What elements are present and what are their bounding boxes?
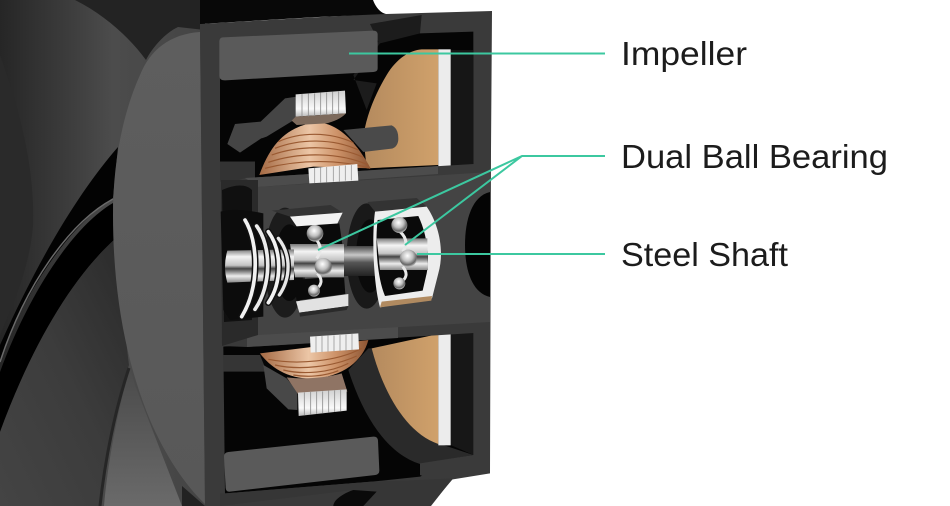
stator core stub xyxy=(343,125,398,152)
left bearing cage and balls xyxy=(307,225,332,297)
impeller magnet bottom xyxy=(224,437,379,492)
lamination middle top xyxy=(308,164,358,183)
white strip bottom xyxy=(438,323,451,445)
white strip top xyxy=(438,49,451,174)
leader line: steel shaft xyxy=(417,253,605,255)
fan blades background xyxy=(0,0,205,506)
left bearing xyxy=(272,205,348,317)
lamination bottom xyxy=(298,389,347,416)
label: Impeller: Impeller xyxy=(621,35,747,72)
copper coil bottom xyxy=(260,340,368,379)
dual ball bearing assembly xyxy=(221,198,441,320)
stator bend bottom xyxy=(287,373,347,394)
label: Steel Shaft: Steel Shaft xyxy=(621,236,788,273)
right bearing xyxy=(367,198,441,307)
lamination top xyxy=(292,91,346,125)
front hub disc xyxy=(113,32,205,504)
copper coil top xyxy=(259,122,371,175)
frame housing xyxy=(200,0,492,506)
impeller magnet top xyxy=(219,31,378,80)
stator block bottom xyxy=(263,365,297,410)
steel shaft end xyxy=(225,249,294,283)
stator block top xyxy=(227,97,297,153)
leader line: impeller xyxy=(349,52,605,54)
right bearing cage and balls xyxy=(391,217,417,289)
tan impeller wall bottom xyxy=(372,334,438,444)
lamination middle bottom xyxy=(310,333,359,353)
lower chamber xyxy=(220,322,490,506)
leader lines: dual ball bearing xyxy=(318,156,605,250)
frame bottom strip xyxy=(220,478,453,506)
right bearing seal xyxy=(347,203,387,309)
spring xyxy=(242,220,288,317)
left bearing seal xyxy=(264,208,306,318)
dark impeller ring xyxy=(348,348,473,464)
base lip xyxy=(420,322,490,482)
central bearing housing xyxy=(220,163,490,347)
label: Dual Ball Bearing: Dual Ball Bearing xyxy=(621,138,888,175)
black recess behind spring xyxy=(221,210,263,320)
axle hole xyxy=(465,192,490,297)
tan impeller wall top xyxy=(363,49,438,168)
upper chamber xyxy=(219,15,473,187)
middle shaft xyxy=(342,246,378,276)
